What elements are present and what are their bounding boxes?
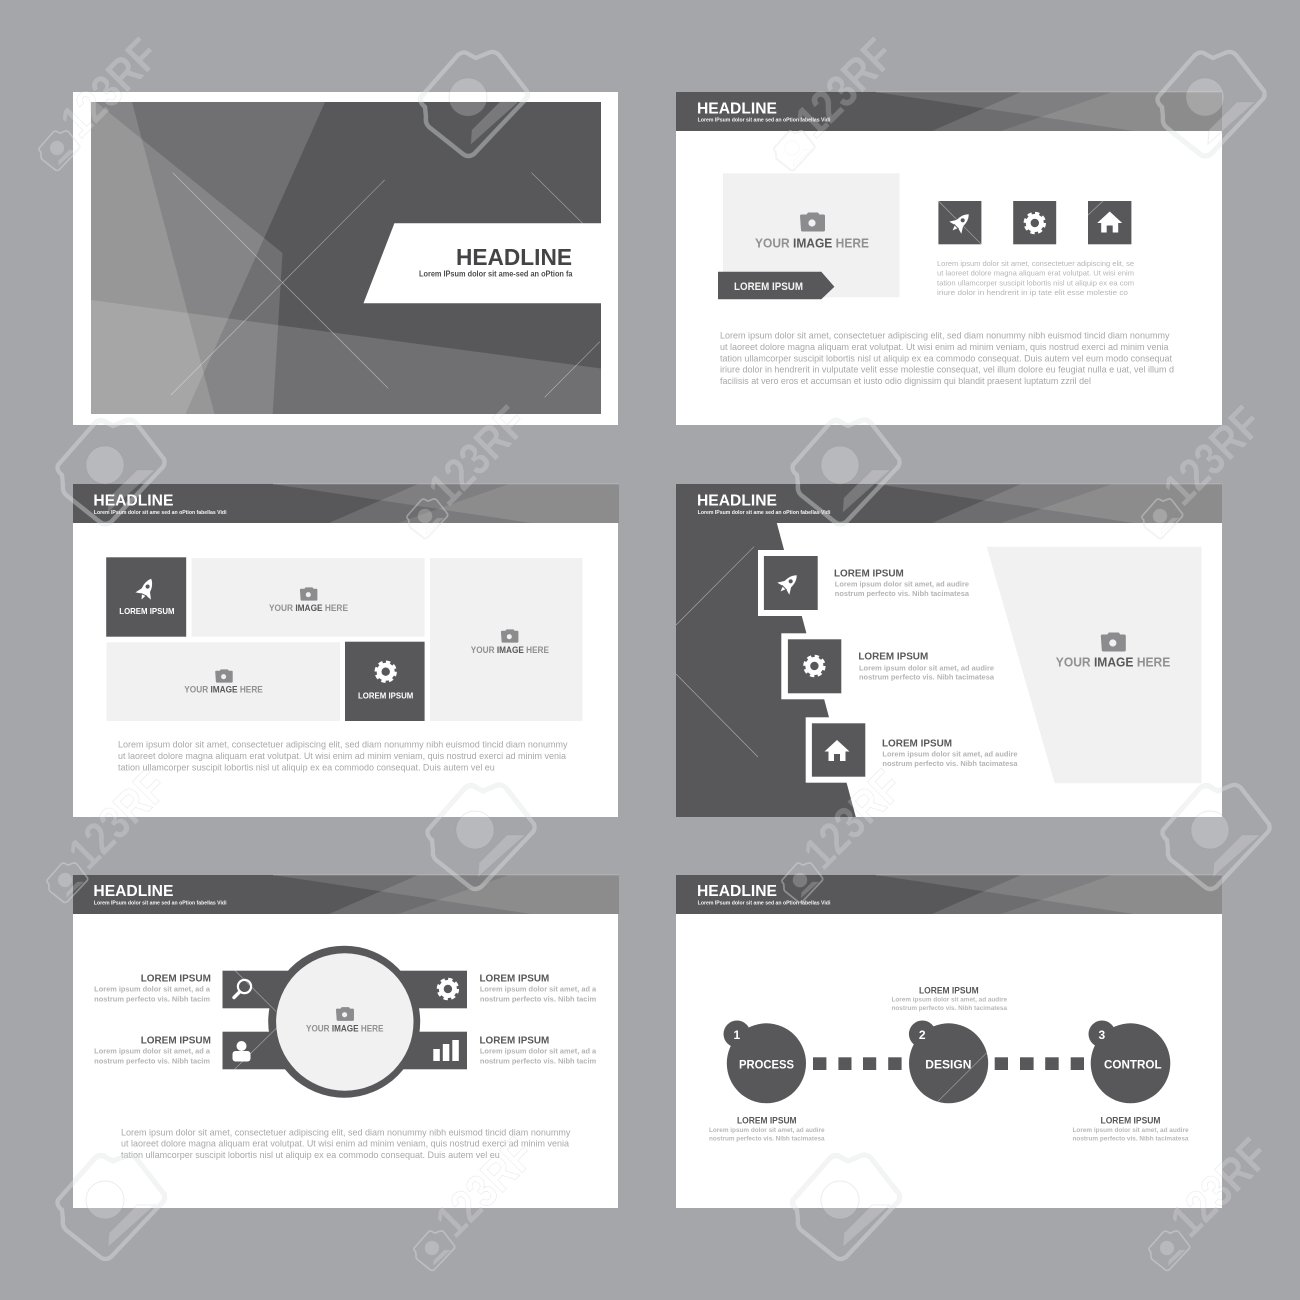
tile: gear	[345, 642, 425, 721]
header bar: HEADLINE	[93, 883, 174, 900]
label: bottom left: nostrum perfecto vis. Nibh tacim	[94, 1058, 210, 1065]
body paragraph: Lorem ipsum dolor sit amet, consectetuer adipiscing elit, sed diam nonummy nibh euismod tincid diam nonummy	[121, 1127, 571, 1137]
watermark overlay: 123RF	[425, 1128, 544, 1247]
label: bottom left: Lorem ipsum dolor sit amet, ad a	[94, 1049, 210, 1056]
icon: search	[234, 980, 251, 998]
body paragraph: ut laoreet dolore magna aliquam erat volutpat. Ut wisi enim ad minim veniam, quis nostrud exerci ad minim venia	[118, 751, 567, 761]
header bar	[676, 92, 1222, 131]
connector squares 2	[995, 1057, 1084, 1070]
label: top left: LOREM IPSUM	[141, 973, 211, 985]
tile: rocket: LOREM IPSUM	[119, 606, 174, 616]
icon: gear	[1013, 201, 1056, 244]
arrow tag	[718, 272, 834, 299]
label: bottom right	[480, 1034, 596, 1065]
list text 1: nostrum perfecto vis. Nibh tacimatesa	[835, 591, 969, 598]
list text 3	[882, 738, 1018, 768]
watermark overlay: 123RF	[58, 760, 177, 879]
panel: image and icons slide	[676, 92, 1222, 425]
caption: process: nostrum perfecto vis. Nibh tacimatesa	[709, 1135, 825, 1142]
header bar	[73, 875, 619, 914]
cover title band: HEADLINE	[456, 244, 572, 270]
list text 3: Lorem ipsum dolor sit amet, ad audire	[882, 752, 1018, 759]
tile: gear: LOREM IPSUM	[358, 690, 413, 700]
panel: circle diagram slide	[73, 875, 619, 1208]
step 3: control	[1088, 1020, 1170, 1103]
header bar	[73, 484, 619, 523]
list icon: gear	[781, 633, 841, 699]
image placeholder: wide bottom	[106, 642, 340, 721]
caption: control: LOREM IPSUM	[1100, 1116, 1160, 1126]
caption: control	[1072, 1116, 1189, 1142]
icon: home	[1088, 201, 1131, 244]
header bar: Lorem IPsum dolor sit ame sed an oPtion fabellas Vidi	[94, 901, 227, 907]
label: top left	[94, 973, 211, 1003]
body paragraph: Lorem ipsum dolor sit amet, consectetuer adipiscing elit, sed diam nonummy nibh euismod tincid diam nonummy	[118, 740, 568, 750]
watermark overlay: 123RF	[418, 396, 537, 515]
list icon: rocket	[758, 550, 818, 616]
image placeholder: wide bottom: YOUR IMAGE HERE	[184, 685, 263, 695]
step 3: control: CONTROL	[1104, 1057, 1162, 1071]
body paragraph	[118, 740, 568, 772]
label: top left: Lorem ipsum dolor sit amet, ad a	[94, 987, 210, 994]
caption: process	[709, 1116, 825, 1142]
image placeholder: wide top: YOUR IMAGE HERE	[269, 603, 348, 613]
label: top right	[480, 973, 596, 1003]
icon: rocket	[938, 201, 981, 244]
body paragraph: iriure dolor in hendrerit in vulputate velit esse molestie consequat, vel illum dolore eu feugiat nulla e uat, vel illum d	[720, 365, 1174, 375]
cover artwork	[91, 102, 601, 414]
tile: rocket	[106, 557, 186, 637]
step 1: process: 1	[734, 1028, 740, 1042]
caption: process: Lorem ipsum dolor sit amet, ad audire	[709, 1127, 825, 1134]
list text 3: nostrum perfecto vis. Nibh tacimatesa	[882, 761, 1018, 768]
cover title band	[364, 223, 601, 303]
header bar: HEADLINE	[697, 883, 777, 900]
caption: design: LOREM IPSUM	[919, 985, 979, 995]
step 2: design: 2	[919, 1028, 926, 1042]
image placeholder: tall: YOUR IMAGE HERE	[471, 645, 549, 655]
caption: design	[892, 985, 1007, 1012]
header bar	[676, 875, 1222, 914]
panel: cover slide	[73, 92, 618, 425]
body paragraph	[720, 330, 1174, 386]
label: top left: nostrum perfecto vis. Nibh tacim	[94, 996, 210, 1003]
circle diagram	[222, 946, 467, 1098]
step 2: design: DESIGN	[925, 1057, 971, 1071]
list text 2: nostrum perfecto vis. Nibh tacimatesa	[859, 674, 994, 681]
icon caption text: tation ullamcorper suscipit lobortis nisl ut aliquip ex ea com	[937, 278, 1134, 287]
icon caption text	[937, 259, 1134, 297]
dark side shape	[676, 520, 856, 817]
list text 3: LOREM IPSUM	[882, 738, 952, 750]
icon caption text: ut laoreet dolore magna aliquam erat volutpat. Ut wisi enim	[937, 269, 1134, 278]
caption: design: Lorem ipsum dolor sit amet, ad audire	[892, 997, 1007, 1004]
image placeholder: slanted: YOUR IMAGE HERE	[1056, 655, 1171, 670]
icon: person	[232, 1041, 250, 1062]
label: bottom right: LOREM IPSUM	[480, 1034, 550, 1046]
body paragraph: ut laoreet dolore magna aliquam erat volutpat. Ut wisi enim ad minim veniam, quis nostrud exerci ad minim venia	[720, 342, 1169, 352]
caption: control: Lorem ipsum dolor sit amet, ad audire	[1072, 1127, 1189, 1134]
image placeholder	[723, 173, 900, 297]
step 2: design	[909, 1020, 988, 1103]
label: top right: LOREM IPSUM	[480, 973, 550, 985]
watermark overlay: 123RF	[50, 28, 169, 147]
image placeholder: tall	[430, 558, 582, 721]
list text 1	[834, 568, 969, 598]
header bar: Lorem IPsum dolor sit ame sed an oPtion fabellas Vidi	[698, 118, 831, 124]
panel: image grid slide	[73, 484, 619, 817]
body paragraph: facilisis at vero eros et accumsan et iusto odio dignissim qui blandit praesent luptatum zzril del	[720, 376, 1091, 386]
cover title band: Lorem IPsum dolor sit ame-sed an oPtion fa	[419, 269, 573, 279]
step 1: process: PROCESS	[739, 1057, 794, 1071]
header bar: HEADLINE	[697, 100, 777, 117]
panel: staggered list slide	[676, 484, 1222, 817]
list text 2: Lorem ipsum dolor sit amet, ad audire	[859, 665, 994, 672]
icon caption text: iriure dolor in hendrerit in ip tate elit esse molestie co	[937, 288, 1128, 297]
caption: process: LOREM IPSUM	[737, 1116, 797, 1126]
body paragraph: tation ullamcorper suscipit lobortis nisl ut aliquip ex ea commodo consequat. Duis autem vel eu	[121, 1150, 500, 1160]
list text 2: LOREM IPSUM	[858, 650, 928, 662]
image placeholder: slanted	[987, 547, 1202, 783]
header bar: Lorem IPsum dolor sit ame sed an oPtion fabellas Vidi	[698, 901, 831, 907]
body paragraph: Lorem ipsum dolor sit amet, consectetuer adipiscing elit, sed diam nonummy nibh euismod tincid diam nonummy	[720, 330, 1170, 340]
list icon: home	[806, 717, 866, 783]
step 1: process	[724, 1020, 806, 1103]
header bar: Lorem IPsum dolor sit ame sed an oPtion fabellas Vidi	[94, 510, 227, 516]
caption: design: nostrum perfecto vis. Nibh tacimatesa	[892, 1005, 1007, 1012]
label: bottom right: nostrum perfecto vis. Nibh tacim	[480, 1058, 596, 1065]
header bar: HEADLINE	[697, 493, 777, 510]
icon: gear	[438, 979, 458, 999]
arrow tag: LOREM IPSUM	[734, 281, 803, 293]
label: top right: Lorem ipsum dolor sit amet, ad a	[480, 987, 596, 994]
header bar	[676, 484, 1222, 523]
list text 1: LOREM IPSUM	[834, 568, 904, 580]
label: bottom left: LOREM IPSUM	[141, 1034, 211, 1046]
watermark overlay: 123RF	[1160, 1128, 1279, 1247]
body paragraph: ut laoreet dolore magna aliquam erat volutpat. Ut wisi enim ad minim veniam, quis nostrud exerci ad minim venia	[121, 1139, 570, 1149]
header bar: Lorem IPsum dolor sit ame sed an oPtion fabellas Vidi	[698, 510, 831, 516]
watermark overlay: 123RF	[793, 760, 912, 879]
body paragraph: tation ullamcorper suscipit lobortis nisl ut aliquip ex ea commodo consequat. Duis autem vel eum modo consequat	[720, 353, 1172, 363]
list text 2	[858, 650, 994, 681]
caption: control: nostrum perfecto vis. Nibh tacimatesa	[1072, 1135, 1189, 1142]
step 3: control: 3	[1098, 1028, 1106, 1042]
watermark overlay: 123RF	[785, 28, 904, 147]
image placeholder: wide top	[192, 558, 425, 637]
connector squares 1	[813, 1057, 902, 1070]
list text 1: Lorem ipsum dolor sit amet, ad audire	[835, 582, 969, 589]
circle diagram: YOUR IMAGE HERE	[306, 1023, 384, 1033]
panel: process timeline slide	[676, 875, 1222, 1208]
header bar: HEADLINE	[93, 493, 174, 510]
label: bottom right: Lorem ipsum dolor sit amet, ad a	[480, 1049, 596, 1056]
body paragraph	[121, 1127, 571, 1160]
body paragraph: tation ullamcorper suscipit lobortis nisl ut aliquip ex ea commodo consequat. Duis autem vel eu	[118, 762, 495, 772]
icon: bar chart	[433, 1040, 459, 1061]
icon caption text: Lorem ipsum dolor sit amet, consectetuer adipiscing elit, se	[937, 259, 1134, 268]
label: bottom left	[94, 1034, 211, 1065]
image placeholder: YOUR IMAGE HERE	[755, 235, 869, 250]
watermark overlay: 123RF	[1153, 396, 1272, 515]
label: top right: nostrum perfecto vis. Nibh tacim	[480, 996, 596, 1003]
